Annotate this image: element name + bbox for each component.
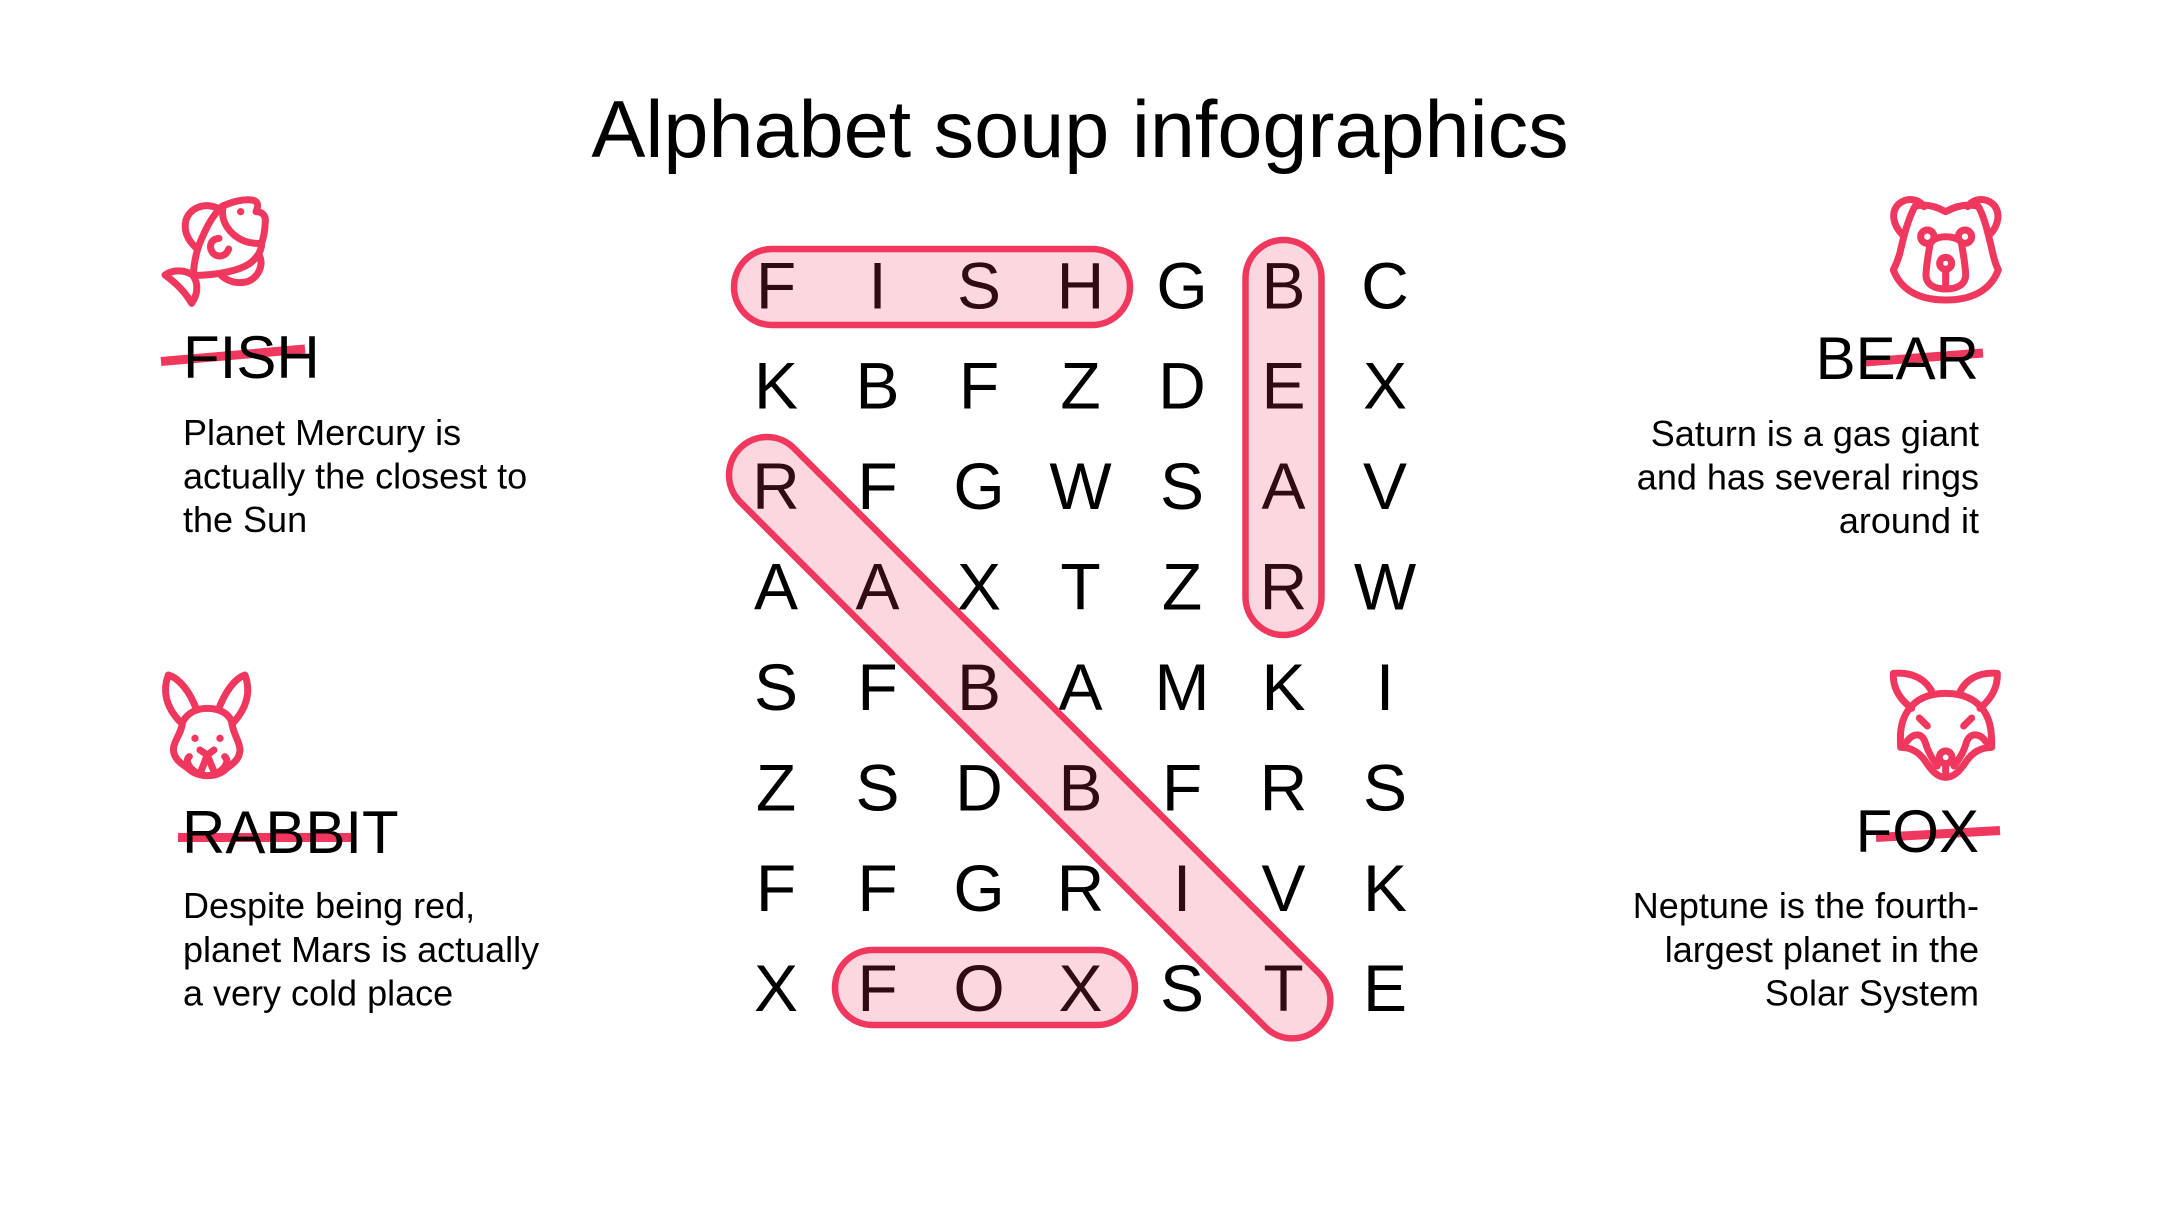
letter grid: F xyxy=(857,449,898,523)
letter grid: I xyxy=(1173,851,1191,925)
letter grid: R xyxy=(1260,750,1307,824)
letter grid: T xyxy=(1060,550,1101,624)
letter grid: S xyxy=(1363,750,1407,824)
letter grid: C xyxy=(1361,248,1409,322)
letter grid: F xyxy=(1162,750,1202,824)
strike: rabbit xyxy=(178,833,352,842)
panel: bear xyxy=(1637,200,1998,541)
letter grid: R xyxy=(752,449,800,523)
letter grid xyxy=(752,248,1417,1025)
icon: bear xyxy=(1893,200,1998,300)
strike: fox xyxy=(1876,830,2000,838)
letter grid: B xyxy=(1261,248,1306,322)
letter grid: T xyxy=(1263,951,1304,1025)
letter grid: A xyxy=(855,550,900,624)
letter grid: D xyxy=(955,750,1003,824)
text: fish: actually the closest to xyxy=(183,456,527,496)
heading: bear: BEAR xyxy=(1816,325,1979,392)
highlight: rabbit diagonal xyxy=(713,421,1346,1054)
letter grid: E xyxy=(1363,951,1407,1025)
letter grid: M xyxy=(1155,650,1209,724)
letter grid: A xyxy=(754,550,798,624)
icon: fish xyxy=(165,200,265,303)
letter grid: X xyxy=(1058,951,1103,1025)
letter grid: H xyxy=(1057,248,1104,322)
icon: fox xyxy=(1893,673,1997,777)
highlight: bear xyxy=(1246,240,1322,635)
letter grid: S xyxy=(957,248,1001,322)
letter grid: R xyxy=(1260,550,1307,624)
letter grid: G xyxy=(953,449,1005,523)
text: fox: largest planet in the xyxy=(1665,929,1979,970)
text: fox: Neptune is the fourth- xyxy=(1633,885,1979,926)
letter grid: F xyxy=(857,851,898,925)
letter grid: V xyxy=(1363,449,1407,523)
letter grid: Z xyxy=(756,750,796,824)
letter grid: G xyxy=(953,851,1005,925)
title: Alphabet soup infographics xyxy=(591,85,1569,175)
letter grid: V xyxy=(1261,851,1306,925)
text: bear: around it xyxy=(1839,500,1979,541)
letter grid: W xyxy=(1354,550,1417,624)
highlight: fox xyxy=(835,950,1135,1025)
letter grid: F xyxy=(959,348,999,422)
letter grid: Z xyxy=(1162,550,1202,624)
letter grid: K xyxy=(1261,650,1306,724)
text: bear: Saturn is a gas giant xyxy=(1651,413,1979,454)
heading: fish: FISH xyxy=(183,324,320,391)
letter grid: X xyxy=(754,951,798,1025)
letter grid: A xyxy=(1058,650,1103,724)
panel: fox xyxy=(1633,673,2000,1014)
heading: fox: FOX xyxy=(1856,798,1979,865)
letter grid: E xyxy=(1261,348,1306,422)
panel: rabbit xyxy=(166,675,539,1014)
letter grid: I xyxy=(1376,650,1394,724)
letter grid: F xyxy=(756,851,796,925)
letter grid: I xyxy=(868,248,887,322)
text: rabbit: a very cold place xyxy=(183,972,453,1014)
strike: fish xyxy=(161,349,305,362)
letter grid: S xyxy=(1160,449,1204,523)
letter grid: B xyxy=(855,348,900,422)
strike: bear xyxy=(1865,353,1983,362)
letter grid: W xyxy=(1049,449,1112,523)
letter grid: B xyxy=(1058,750,1103,824)
heading: rabbit: RABBIT xyxy=(182,799,399,866)
icon: rabbit xyxy=(166,675,248,776)
letter grid: R xyxy=(1057,851,1104,925)
letter grid: S xyxy=(855,750,900,824)
letter grid: Z xyxy=(1060,348,1101,422)
text: fish: the Sun xyxy=(183,499,307,540)
text: bear: and has several rings xyxy=(1637,456,1979,498)
letter grid: S xyxy=(1160,951,1204,1025)
text: rabbit: planet Mars is actually xyxy=(183,929,539,970)
text: fox: Solar System xyxy=(1765,972,1979,1014)
letter grid: B xyxy=(957,650,1001,724)
letter grid: D xyxy=(1158,348,1206,422)
letter grid: K xyxy=(1363,851,1407,925)
letter grid: F xyxy=(756,248,796,322)
letter grid: G xyxy=(1156,248,1208,322)
letter grid: F xyxy=(857,951,898,1025)
letter grid: S xyxy=(754,650,798,724)
letter grid: K xyxy=(754,348,798,422)
highlight: fish xyxy=(734,249,1130,325)
letter grid: A xyxy=(1261,449,1306,523)
text: fish: Planet Mercury is xyxy=(183,412,461,453)
panel: fish xyxy=(161,200,527,540)
letter grid: F xyxy=(857,650,898,724)
letter grid: O xyxy=(953,951,1005,1025)
letter grid: X xyxy=(957,550,1001,624)
letter grid: X xyxy=(1363,348,1407,422)
text: rabbit: Despite being red, xyxy=(183,885,475,926)
